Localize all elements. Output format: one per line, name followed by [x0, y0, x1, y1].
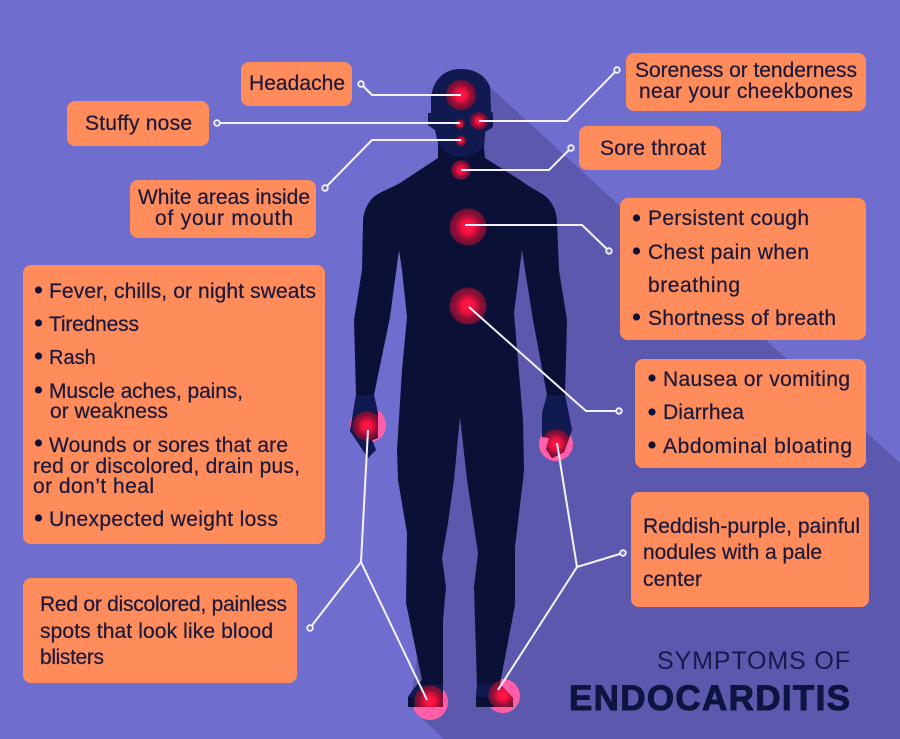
left foot — [408, 685, 443, 697]
callout: painless spots: Red or discolored, painless — [40, 593, 287, 616]
right foot — [476, 684, 513, 698]
callout: stuffy nose — [67, 101, 209, 146]
callout: painless spots: spots that look like blood — [40, 620, 273, 643]
callout: white areas in mouth — [130, 180, 316, 238]
panel: abdominal symptoms — [635, 359, 866, 468]
callout: sore throat: Sore throat — [600, 137, 706, 160]
callout: soreness near cheekbones — [626, 53, 866, 111]
callout: painless spots — [23, 578, 297, 683]
panel: general symptoms: Fever, chills, or night sweats — [49, 280, 316, 303]
callout: stuffy nose: Stuffy nose — [85, 112, 192, 135]
callout: reddish-purple nodules — [631, 492, 869, 607]
panel: general symptoms: Rash — [49, 347, 96, 369]
panel: general symptoms: Muscle aches, pains, — [49, 380, 243, 403]
callout: reddish-purple nodules: nodules with a pale — [643, 541, 822, 564]
callout: reddish-purple nodules: center — [643, 568, 702, 591]
callout: headache — [241, 62, 352, 106]
callout: headache: Headache — [249, 72, 345, 95]
callout: sore throat — [579, 126, 721, 170]
right hand — [542, 395, 572, 458]
panel: chest symptoms: Chest pain when — [648, 241, 809, 264]
callout: soreness near cheekbones: Soreness or tenderness — [635, 59, 857, 82]
panel: general symptoms — [23, 265, 325, 544]
title: SYMPTOMS OF — [657, 647, 850, 675]
symptom hot spots — [352, 80, 571, 717]
panel: general symptoms: Wounds or sores that are — [49, 434, 288, 457]
callout: painless spots: blisters — [40, 646, 104, 669]
callout: reddish-purple nodules: Reddish-purple, painful — [643, 515, 860, 538]
body silhouette — [350, 69, 572, 707]
left hand — [350, 395, 378, 458]
panel: chest symptoms: breathing — [648, 274, 740, 297]
callout: soreness near cheekbones: near your cheekbones — [639, 80, 853, 103]
callout: white areas in mouth: of your mouth — [155, 207, 293, 230]
panel: general symptoms: Unexpected weight loss — [49, 508, 278, 531]
panel: general symptoms: red or discolored, drain pus, — [33, 455, 300, 478]
head — [428, 69, 493, 157]
panel: chest symptoms — [620, 198, 866, 340]
panel: chest symptoms: Shortness of breath — [648, 307, 836, 330]
panel: general symptoms: or don’t heal — [33, 475, 154, 498]
panel: general symptoms: Tiredness — [49, 313, 139, 336]
panel: general symptoms: or weakness — [50, 400, 168, 423]
callout: white areas in mouth: White areas inside — [138, 186, 310, 209]
title — [569, 647, 850, 718]
pink nodule spots behind hands and feet — [350, 407, 573, 720]
connector lines — [214, 67, 626, 700]
panel: abdominal symptoms: Diarrhea — [663, 401, 744, 424]
panel: abdominal symptoms: Abdominal bloating — [663, 435, 852, 458]
panel: abdominal symptoms: Nausea or vomiting — [663, 368, 850, 391]
title: ENDOCARDITIS — [569, 679, 850, 718]
panel: chest symptoms: Persistent cough — [648, 207, 809, 230]
long shadow of the figure — [410, 87, 900, 739]
